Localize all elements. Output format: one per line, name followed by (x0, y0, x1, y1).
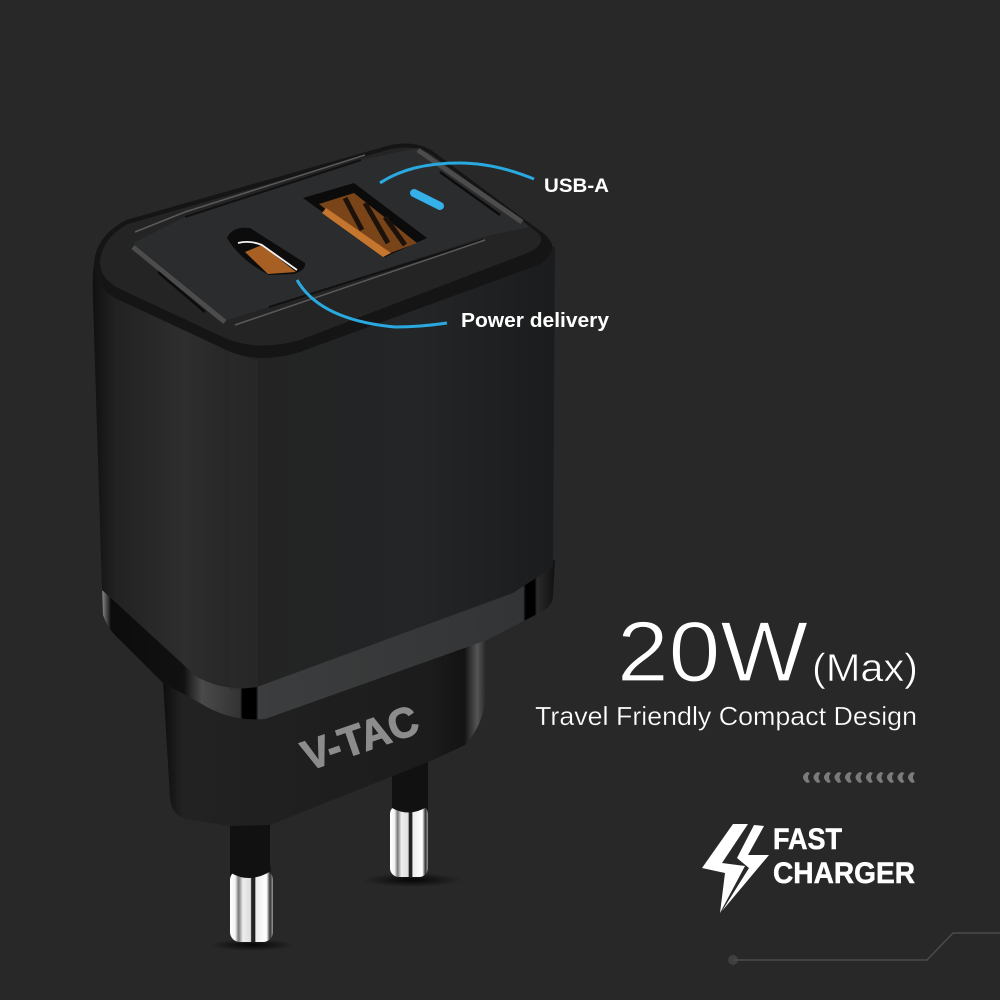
product: USB charger (93, 143, 555, 951)
cap outer lip (100, 147, 541, 346)
headline: 20W (Max): 20W (617, 605, 808, 700)
cap grooves (185, 160, 483, 307)
headline: 20W (Max): (Max) (812, 647, 918, 690)
front plug pin (230, 815, 273, 942)
cap face (133, 148, 529, 320)
callout label: Power delivery: Power delivery (461, 310, 610, 332)
brand logo: V-TAC (296, 696, 424, 780)
label: FAST CHARGER: FAST (773, 823, 842, 856)
LED indicator (414, 193, 440, 206)
callout line: USB-A (380, 163, 534, 183)
front corner shading (230, 347, 258, 690)
subheading: Travel Friendly Compact Design (535, 701, 917, 731)
pin shadows (210, 873, 462, 951)
chrome band (102, 560, 555, 719)
top cap (94, 143, 552, 358)
body (93, 200, 555, 688)
circuit line decoration (728, 933, 1000, 965)
callout line: Power delivery (297, 280, 447, 327)
headline: 20W (Max) (617, 605, 918, 700)
USB-A port (303, 183, 427, 257)
icon: double lightning bolt (702, 824, 769, 913)
label: FAST CHARGER: CHARGER (773, 857, 915, 890)
decorative chevrons (803, 772, 915, 783)
label: FAST CHARGER (773, 823, 915, 890)
callout label: USB-A: USB-A (544, 176, 609, 197)
USB-C port (227, 228, 305, 275)
plug base (163, 630, 487, 826)
rear plug pin (390, 750, 428, 877)
